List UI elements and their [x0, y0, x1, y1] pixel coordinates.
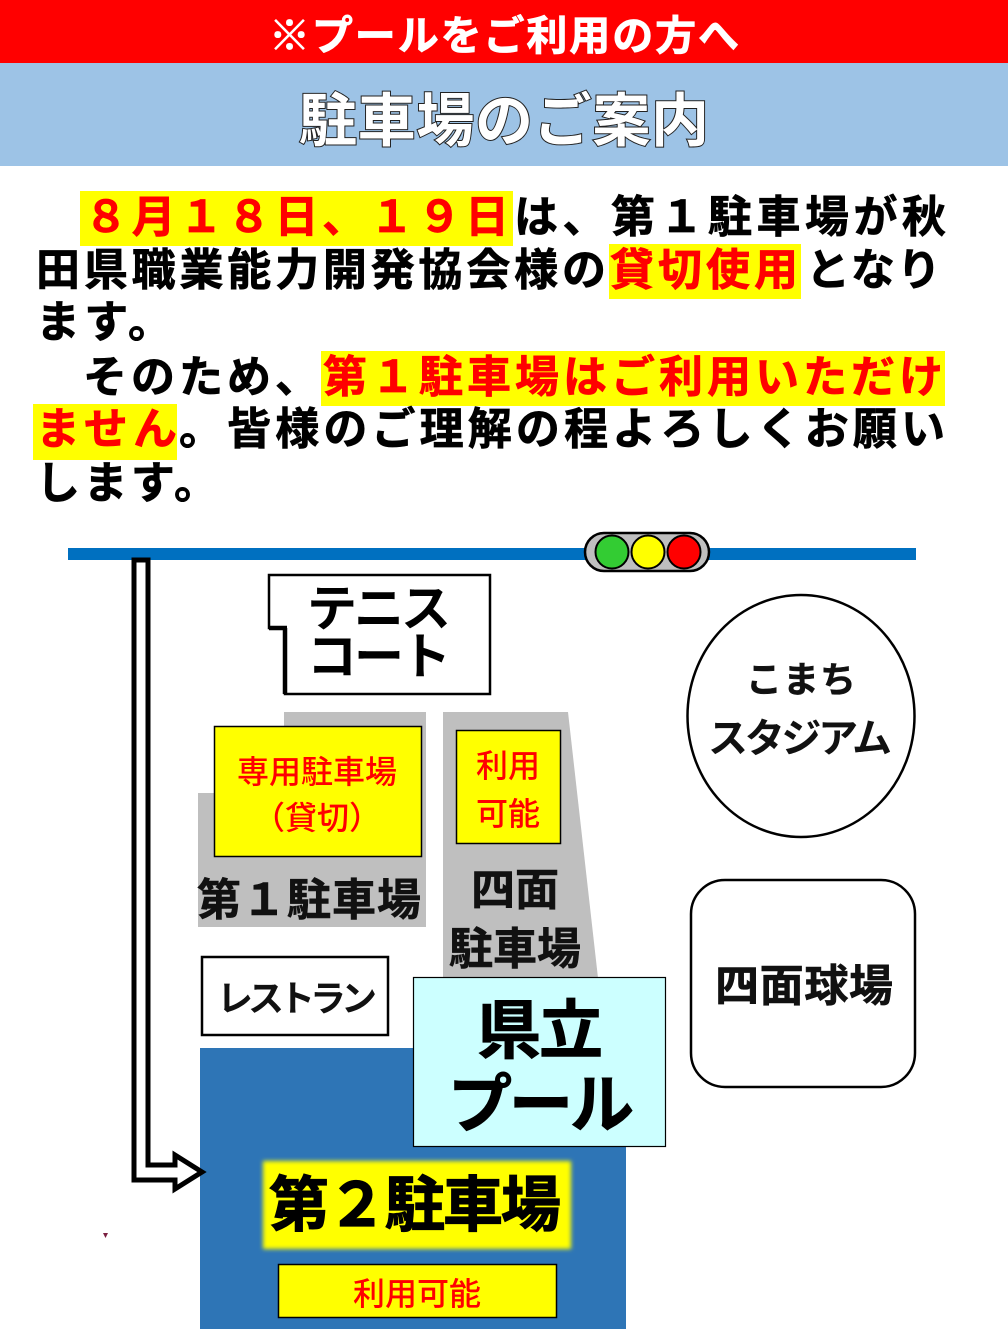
notice text: となり — [806, 246, 941, 295]
shimen baseball field — [691, 880, 915, 1087]
notice text — [33, 191, 946, 508]
panel: shimen parking lot: 四面 — [471, 866, 559, 915]
prefectural pool — [414, 978, 666, 1146]
prefectural pool: プール — [448, 1069, 634, 1141]
first parking reserved label: （貸切） — [253, 800, 381, 836]
tennis court: コート — [307, 629, 451, 685]
small map marker — [103, 1233, 108, 1238]
prefectural pool: 県立 — [477, 995, 603, 1067]
panel: second parking lot — [200, 1048, 626, 1329]
title banner: 駐車場のご案内 — [299, 89, 709, 154]
shimen parking available label: 利用 — [476, 748, 540, 784]
notice text: 。皆様のご理解の程よろしくお願い — [179, 405, 945, 454]
title banner — [0, 63, 1008, 166]
notice text: ます。 — [36, 298, 172, 347]
arrow to second parking — [134, 560, 202, 1189]
restaurant: レストラン — [217, 978, 377, 1019]
second parking heading: 第２駐車場 — [269, 1172, 561, 1239]
panel: first parking lot — [197, 712, 426, 927]
shimen parking available label: 可能 — [476, 796, 540, 832]
tennis court — [269, 575, 490, 694]
komachi stadium: こまち — [746, 659, 856, 700]
second parking available label: 利用可能 — [353, 1276, 481, 1312]
panel: shimen parking lot — [443, 712, 598, 978]
panel: shimen parking lot: 駐車場 — [449, 925, 581, 974]
shimen baseball field: 四面球場 — [715, 962, 893, 1011]
panel: first parking lot: 第１駐車場 — [197, 876, 421, 925]
notice text: 貸切使用 — [610, 246, 798, 295]
icon: traffic light — [585, 533, 709, 571]
shimen parking available label — [456, 730, 560, 844]
notice text: そのため、 — [83, 353, 319, 402]
notice text: 田県職業能力開発協会様の — [36, 246, 606, 295]
notice text: します。 — [36, 459, 218, 508]
notice text: 第１駐車場はご利用いただけ — [323, 353, 943, 402]
tennis court: テニス — [307, 581, 451, 637]
notice text: ません — [36, 405, 177, 454]
notice text: は、第１駐車場が秋 — [514, 193, 946, 242]
first parking reserved label — [214, 726, 422, 856]
restaurant — [202, 957, 388, 1035]
road — [68, 548, 916, 560]
komachi stadium — [688, 595, 914, 837]
first parking reserved label: 専用駐車場 — [237, 754, 397, 790]
second parking available label — [278, 1264, 556, 1318]
red banner — [0, 0, 1008, 63]
komachi stadium: スタジアム — [708, 717, 892, 761]
notice text: ８月１８日、１９日 — [84, 193, 509, 242]
red banner: ※プールをご利用の方へ — [269, 13, 739, 59]
